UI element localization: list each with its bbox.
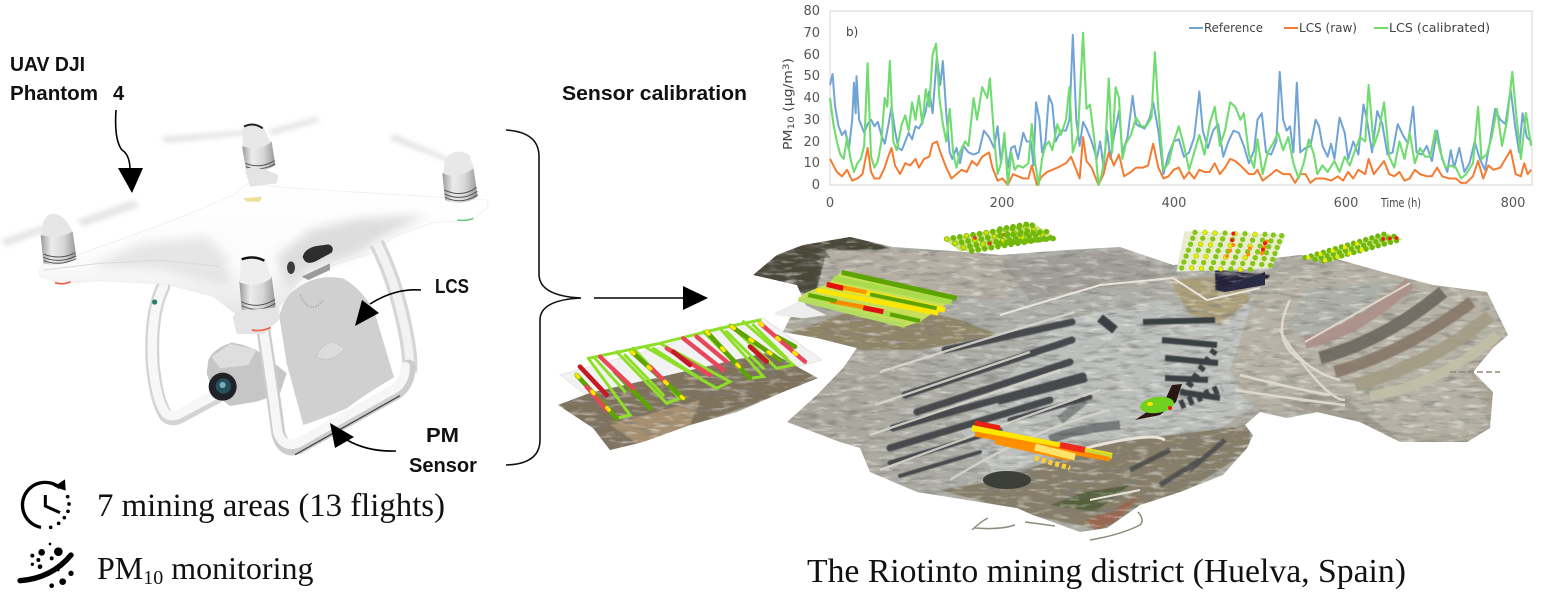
y axis title: ) [781,58,795,63]
y axis title: PM [781,132,795,150]
line chart: PM10 over time [781,4,1532,211]
x axis labels [826,196,1525,211]
rear landing leg [152,287,217,418]
plotted series [830,33,1531,185]
label: UAV DJI Phantom 4: Phantom [10,83,98,105]
body shading [90,215,427,290]
left pit dark terraces [890,322,1090,476]
y axis labels: 0 [812,178,820,193]
y axis title: 3 [782,63,792,70]
sensor port and vent [287,244,333,280]
label: LCS: LCS [435,276,469,298]
y axis labels: 10 [803,156,820,171]
left flight plate [560,318,822,418]
arrow: PM sensor [330,423,396,451]
y axis labels: 80 [803,4,820,19]
caption: mining district: The Riotinto mining district (Huelva, Spain) [807,553,1406,590]
panel letter: b) [846,25,858,39]
text: PM10 monitoring: 10 [143,567,163,589]
upper left outcrop [750,235,890,295]
photo grain [550,230,1520,540]
bracket [506,130,581,465]
y axis labels: 50 [803,69,820,84]
x axis labels: 600 [1334,196,1358,211]
y axis title: 10 [787,116,797,129]
icon: dust particles [20,543,74,588]
gimbal camera [207,343,287,406]
label: PM Sensor: Sensor [409,455,477,477]
drone body [38,183,488,322]
label: UAV DJI Phantom 4: 4 [113,83,125,105]
legend [1189,21,1490,35]
text: mining areas: 7 mining areas (13 flights) [97,488,445,524]
icon: clock with circular arrow [22,479,71,529]
arrow: LCS [355,290,421,326]
label: PM Sensor [409,425,477,477]
pale contour lines [1235,283,1410,405]
y axis labels: 20 [803,135,820,150]
status lights and logo [55,197,473,331]
arrow: to mining district [594,286,708,310]
roads [1000,278,1260,500]
right pit terrace bands [1305,283,1497,396]
top yellow spoil [1170,275,1250,325]
map: 3D terrain of the mining district [550,223,1520,540]
motors [41,124,478,334]
flight data: central pit [1139,395,1175,415]
bottom tan slope [940,425,1250,530]
label: sensor calibration: Sensor calibration [562,83,747,105]
series: LCS raw [830,137,1531,185]
series: LCS calibrated [830,33,1531,185]
drone photo [0,117,488,455]
y axis labels: 30 [803,113,820,128]
pale berms [870,312,1110,480]
y axis labels: 70 [803,26,820,41]
label: UAV DJI Phantom 4: UAV DJI [10,54,85,76]
legend: Reference [1204,21,1263,35]
x axis labels: 200 [990,196,1014,211]
terrain surface [550,230,1520,540]
flight data: upper left area [775,272,957,327]
x axis labels: 400 [1162,196,1186,211]
LCS sensor plate [279,277,394,425]
y axis title: (µg/m [781,70,795,116]
flight data: lower area [972,423,1112,468]
label: UAV DJI Phantom 4 [10,54,125,105]
flight data: left area [577,320,805,418]
y axis labels [803,4,820,193]
text: PM10 monitoring: monitoring [163,550,313,586]
y axis labels: 60 [803,48,820,63]
flight data: top areas (dotted grids) [943,223,1052,251]
series: reference [830,35,1531,174]
x axis labels: 0 [826,196,834,211]
front landing leg [263,330,409,448]
central terraces [1050,318,1225,485]
y axis labels: 40 [803,91,820,106]
legend: LCS (calibrated) [1389,21,1490,35]
dark pit pool [1135,384,1182,420]
text: PM10 monitoring: PM [97,550,143,586]
right pit base [1230,265,1505,440]
propeller blur [0,117,447,247]
label: PM Sensor: PM [426,425,459,447]
arrow: to drone body [116,110,143,193]
loose terrain edge scraps [972,372,1500,540]
left block colours [555,350,820,455]
x axis labels: 800 [1501,196,1525,211]
central grey rock [961,296,1254,472]
x axis title: Time (h) [1380,196,1421,210]
legend: LCS (raw) [1299,21,1357,35]
